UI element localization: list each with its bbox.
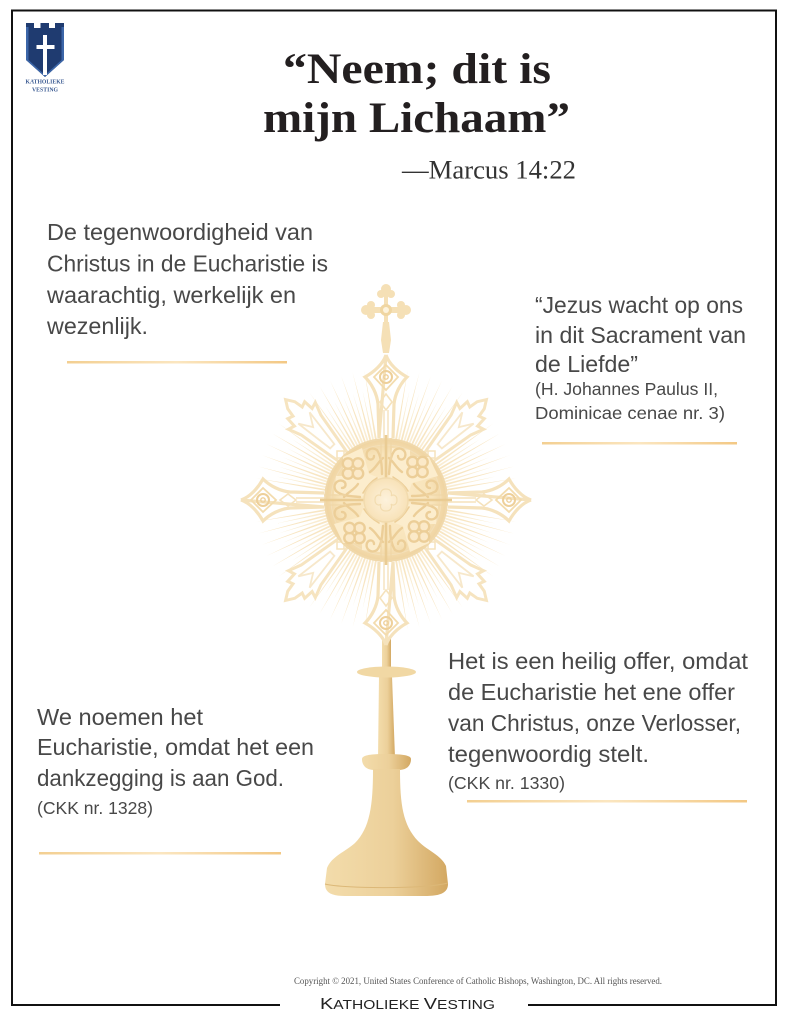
text block: thanksgiving: [37, 704, 314, 818]
text block: real presence: De tegenwoordigheid van: [47, 219, 313, 245]
text block: sacrifice: de Eucharistie het ene offer: [448, 679, 735, 705]
text block: real presence: [46, 219, 328, 339]
logo wordmark: VESTING: [32, 86, 58, 94]
text block: Jezus quote: “Jezus wacht op ons: [535, 292, 743, 318]
title: mijn Lichaam”: [263, 95, 570, 142]
central disc: [320, 435, 452, 565]
sunburst: [237, 351, 535, 649]
diamond arms: [241, 355, 531, 645]
rays: [237, 351, 535, 649]
monstrance illustration: [237, 284, 535, 896]
text block: thanksgiving: dankzegging is aan God.: [37, 765, 284, 791]
icon: shield with cross: [26, 23, 64, 77]
logo: Katholieke Vesting shield: [26, 23, 64, 94]
copyright line: Copyright © 2021, United States Conference of Catholic Bishops, Washington, DC. All rights reserved.: [294, 976, 662, 987]
title: [263, 46, 570, 142]
title: “Neem; dit is: [283, 46, 551, 93]
text block: Jezus quote: de Liefde”: [535, 351, 638, 377]
diagonal arms: [272, 386, 500, 614]
text block: sacrifice: Het is een heilig offer, omdat: [448, 648, 748, 674]
scripture reference: —Marcus 14:22: [401, 156, 576, 184]
text block: thanksgiving: (CKK nr. 1328): [37, 798, 153, 818]
text block: sacrifice: tegenwoordig stelt.: [448, 741, 649, 767]
text block: thanksgiving: Eucharistie, omdat het een: [37, 734, 314, 760]
footer wordmark: KATHOLIEKE VESTING: [320, 996, 495, 1013]
text block: Jezus quote: in dit Sacrament van: [535, 322, 746, 348]
text block: Jezus quote: (H. Johannes Paulus II,: [535, 379, 718, 399]
text block: real presence: Christus in de Eucharistie is: [47, 250, 328, 276]
corner squares: [337, 451, 435, 549]
stand: [325, 636, 448, 896]
text block: real presence: wezenlijk.: [46, 313, 148, 339]
cross finial: [361, 284, 411, 353]
text block: thanksgiving: We noemen het: [37, 704, 203, 730]
text block: sacrifice: van Christus, onze Verlosser,: [448, 710, 741, 736]
text block: Jezus quote: [535, 292, 746, 423]
logo wordmark: [26, 78, 64, 94]
text block: sacrifice: (CKK nr. 1330): [448, 773, 565, 793]
logo wordmark: KATHOLIEKE: [26, 78, 64, 86]
text block: real presence: waarachtig, werkelijk en: [46, 282, 296, 308]
text block: Jezus quote: Dominicae cenae nr. 3): [535, 403, 725, 423]
text block: sacrifice: [448, 648, 748, 793]
